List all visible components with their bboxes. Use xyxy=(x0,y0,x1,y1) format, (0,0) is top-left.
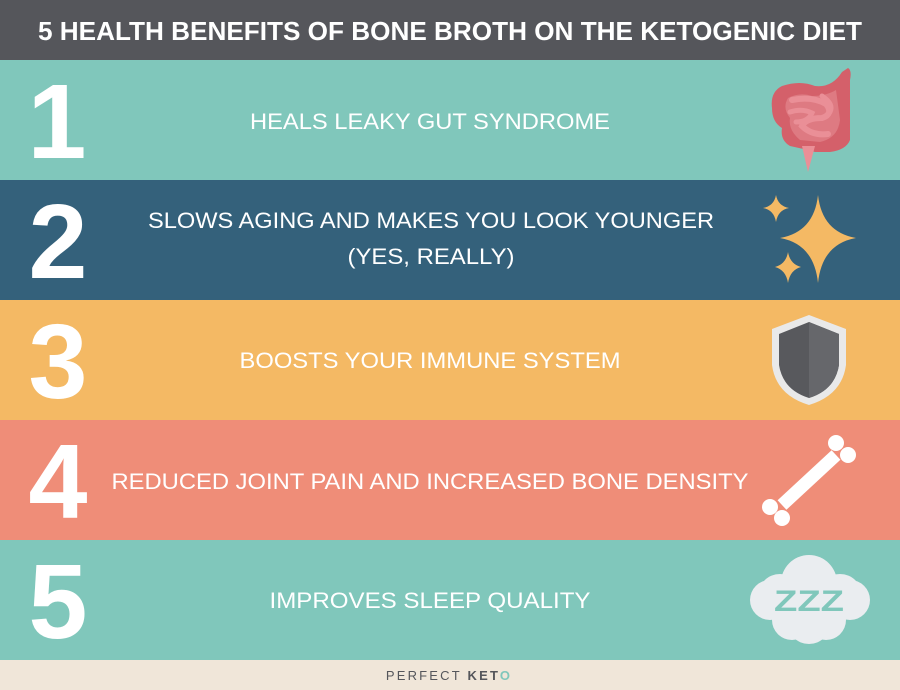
panel: row 2 xyxy=(0,180,900,301)
text: slows aging: SLOWS AGING AND MAKES YOU LOOK YOUNGER xyxy=(148,208,714,233)
title: 5 HEALTH BENEFITS OF BONE BROTH ON THE KETOGENIC DIET xyxy=(38,16,862,46)
number 1: 1 xyxy=(28,63,86,181)
panel: row 3 xyxy=(0,300,900,421)
text: heals leaky gut: HEALS LEAKY GUT SYNDROME xyxy=(250,109,610,134)
icon: intestines xyxy=(772,68,851,172)
logo: perfect keto: PERFECT KETO xyxy=(386,668,512,683)
text: immune: BOOSTS YOUR IMMUNE SYSTEM xyxy=(240,348,620,373)
number 3: 3 xyxy=(29,303,87,421)
footer xyxy=(0,660,900,690)
icon: cloud zzz xyxy=(750,555,870,644)
number 5: 5 xyxy=(29,543,87,661)
title bar xyxy=(0,0,900,60)
text: slows aging xyxy=(148,208,714,269)
icon: bone xyxy=(762,435,856,526)
text: joint pain: REDUCED JOINT PAIN AND INCREASED BONE DENSITY xyxy=(112,469,749,494)
panel: row 5 xyxy=(0,540,900,661)
number 4: 4 xyxy=(29,423,88,541)
icon: cloud zzz: ZZZ xyxy=(774,585,844,618)
text: slows aging: (YES, REALLY) xyxy=(348,244,514,269)
icon: sparkles xyxy=(763,195,856,283)
number 2: 2 xyxy=(29,183,87,301)
panel: row 4 xyxy=(0,420,900,541)
text: sleep: IMPROVES SLEEP QUALITY xyxy=(270,588,591,613)
panel: row 1 xyxy=(0,60,900,181)
icon: shield xyxy=(772,315,846,405)
